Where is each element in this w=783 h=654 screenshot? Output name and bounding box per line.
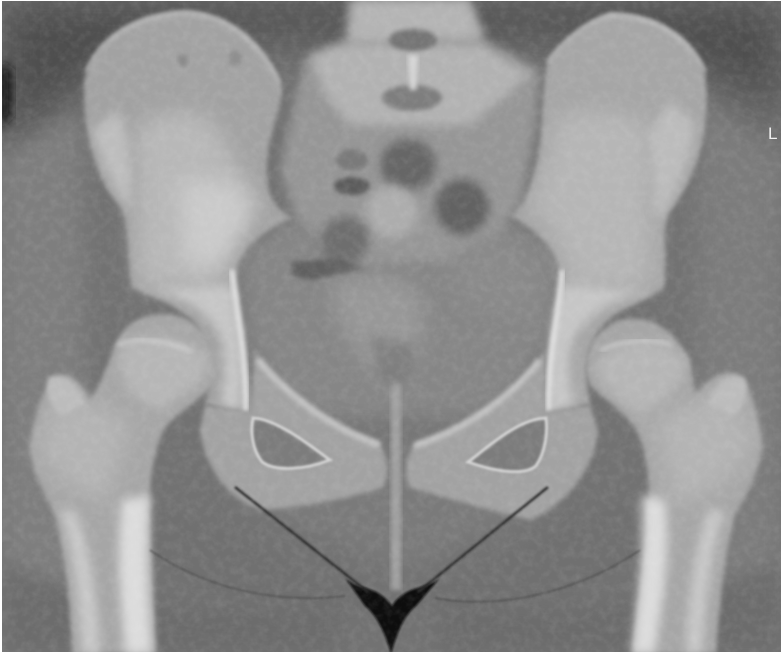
left femur — [30, 314, 216, 654]
bowel gas pattern — [331, 267, 425, 636]
sacrum and lumbar spine — [280, 0, 540, 280]
right ilium — [510, 13, 707, 414]
left ilium — [84, 11, 292, 412]
right femur — [586, 319, 762, 654]
right pubic and ischial rami — [406, 350, 598, 520]
dark perineal gap and skin folds — [150, 487, 640, 654]
left pubic and ischial rami — [200, 350, 387, 510]
side marker L: L — [768, 124, 777, 143]
